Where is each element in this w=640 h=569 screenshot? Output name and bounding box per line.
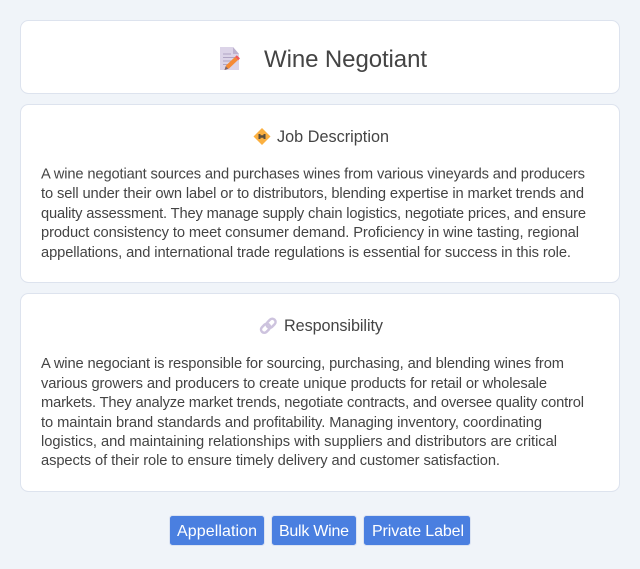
text block: responsibility: to maintain brand standards and profitability. Managing inventory, coordinating [41,415,542,431]
panel: responsibility [20,294,620,492]
text block: responsibility [41,356,584,469]
text block: job description: quality assessment. They manage supply chain logistics, negotiate prices, and ensure [41,206,586,222]
text block: responsibility: aspects of their role to ensure timely delivery and customer satisfaction. [41,453,500,469]
panel: job description [20,104,620,282]
text block: job description: A wine negotiant sources and purchases wines from various vineyards and producers [41,166,585,182]
icon: chain link [260,317,277,334]
text block: job description [41,166,586,261]
tag: appellation [170,516,264,546]
text block: job description: to sell under their own label or to distributors, blending expertise in market trends and [41,186,584,202]
text block: job description: product consistency to meet consumer demand. Proficiency in wine tasting, regional [41,225,579,241]
icon: memo with pencil [220,47,240,70]
heading: responsibility: Responsibility [284,317,384,335]
tags row [170,516,470,546]
text block: responsibility: A wine negociant is responsible for sourcing, purchasing, and blending wines from [41,356,564,372]
title: Wine Negotiant [264,46,427,73]
icon: orange diamond [254,128,270,145]
text block: responsibility: various growers and producers to create unique products for retail or wholesale [41,376,547,392]
text block: responsibility: logistics, and maintaining relationships with suppliers and distributors are critical [41,434,557,450]
tag: bulk wine [272,516,356,546]
panel: title header [20,20,620,94]
tag: private label: Private Label [372,523,464,540]
tag: private label [364,516,470,546]
text block: responsibility: markets. They analyze market trends, negotiate contracts, and oversee quality control [41,395,584,411]
text block: job description: appellations, and international trade regulations is essential for success in this role. [41,245,571,261]
heading: job description: Job Description [277,128,389,146]
tag: appellation: Appellation [177,523,257,540]
tag: bulk wine: Bulk Wine [279,523,349,540]
